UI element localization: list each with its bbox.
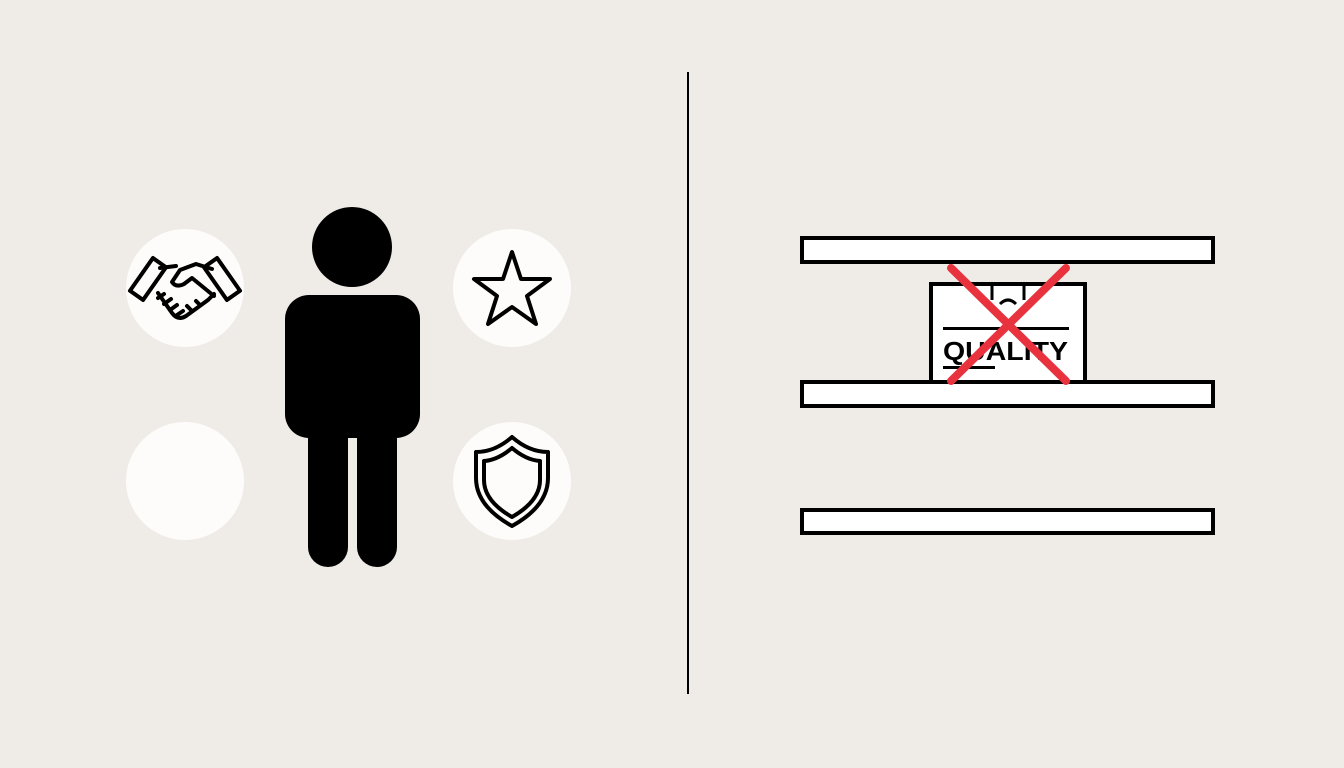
icon: handshake circle: [126, 229, 244, 347]
red cross mark: [951, 268, 1066, 381]
label: QUALITY: QUALITY: [943, 336, 1068, 366]
icon: shield circle: [453, 422, 571, 540]
shelf bottom: [802, 510, 1213, 533]
panel: shelves with rejected quality box: [802, 238, 1213, 533]
panel: person with attributes: [126, 207, 571, 567]
empty circle: [126, 422, 244, 540]
icon: person figure: [285, 207, 420, 567]
shelf top: [802, 238, 1213, 262]
shelf middle: [802, 382, 1213, 406]
divider line: [687, 72, 689, 694]
icon: star circle: [453, 229, 571, 347]
quality box: [931, 284, 1085, 382]
